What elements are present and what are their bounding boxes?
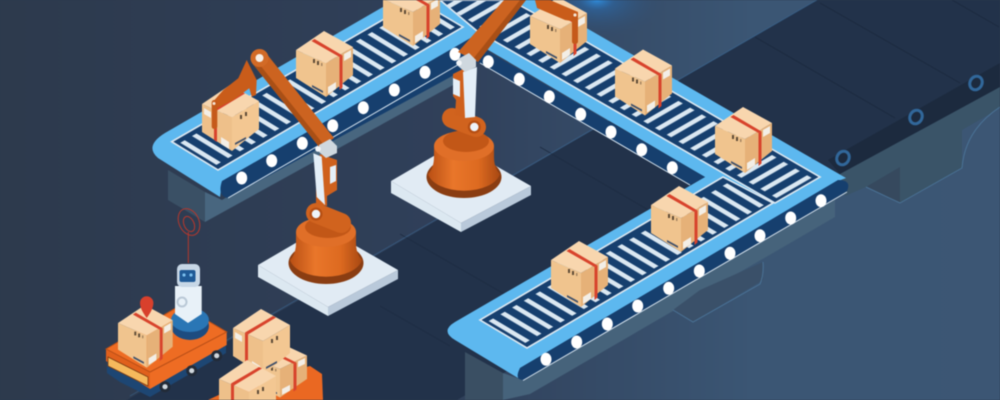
cart top — [106, 305, 227, 372]
top box — [233, 309, 290, 375]
robot arm 1 — [212, 49, 364, 284]
AGV cart with robot — [106, 205, 227, 397]
belt rollers — [834, 74, 985, 167]
robot head — [177, 264, 200, 306]
cart light strip — [108, 357, 148, 386]
conveyor: side strips with rollers — [220, 36, 848, 380]
robot arm 2 — [426, 0, 578, 198]
box on conveyor 3 — [383, 0, 440, 46]
robot arm 2 plate — [391, 143, 531, 232]
box on conveyor 4 — [530, 0, 587, 63]
box on conveyor 7 — [651, 186, 708, 252]
background belt side and support — [840, 87, 1000, 203]
stacked cart and boxes — [208, 309, 323, 400]
location pin — [140, 296, 153, 318]
conveyor supports — [168, 66, 835, 400]
box held by arm 1 — [202, 85, 259, 151]
cart wheels — [160, 350, 222, 392]
front box, cropped by the frame — [219, 360, 276, 400]
conveyor: L-shaped light blue frame — [152, 0, 846, 378]
robot body — [175, 286, 202, 323]
second cart — [208, 366, 323, 400]
cart base — [107, 343, 226, 397]
box on conveyor 5 — [615, 50, 672, 116]
rear box — [250, 342, 307, 397]
antenna with signal ring — [174, 205, 204, 263]
box on conveyor 8 — [551, 241, 608, 307]
box on conveyor 2 — [296, 31, 353, 97]
conveyor: belt panels with stripes — [172, 0, 820, 348]
blue glow — [527, 0, 667, 40]
box on conveyor 6 — [715, 107, 772, 173]
box on cart — [118, 305, 173, 368]
belt front edge — [828, 63, 1000, 174]
robot base — [171, 308, 209, 340]
cart body — [106, 349, 150, 389]
robot arm 1 plate — [258, 227, 398, 316]
